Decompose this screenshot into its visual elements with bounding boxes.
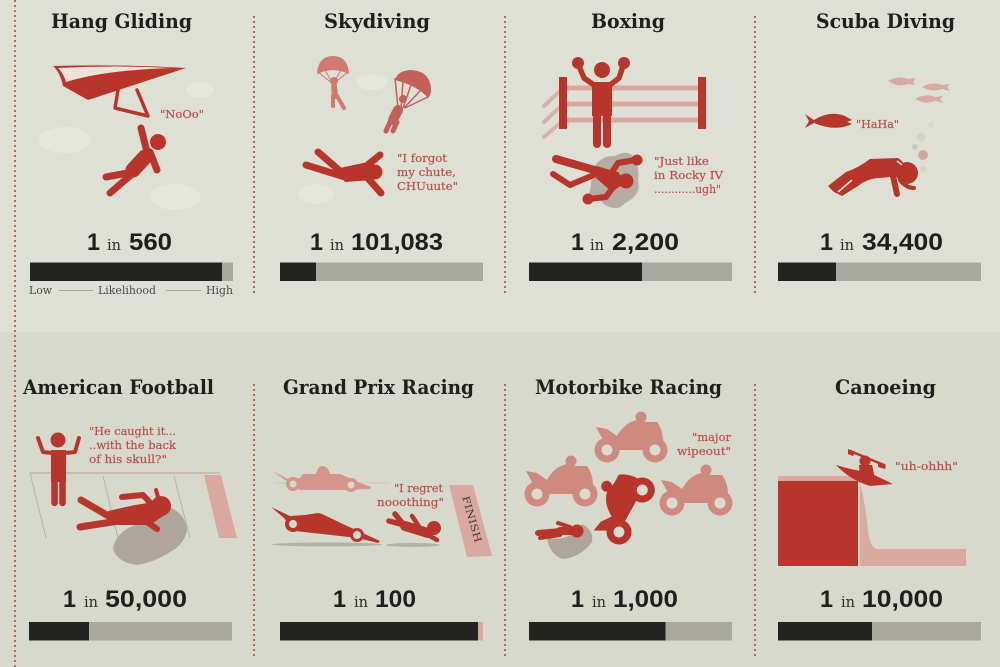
stat: hang gliding 1 in 560: in <box>107 236 121 254</box>
stat: boxing: 2,200 <box>612 229 679 256</box>
quote: "HaHa" <box>856 118 899 131</box>
quote: "NoOo" <box>160 108 204 121</box>
stat: hang gliding 1 in 560: 560 <box>129 229 172 256</box>
panel: american football <box>22 375 237 565</box>
heading: american football: American Football <box>22 375 214 399</box>
icon: bubbles <box>912 122 934 172</box>
stat: skydiving: 101,083 <box>351 229 443 256</box>
panel: grand prix racing <box>271 375 492 557</box>
icon: large parachutist <box>386 70 431 131</box>
icon: fallen boxer <box>553 153 642 208</box>
heading: grand prix racing: Grand Prix Racing <box>283 375 474 399</box>
panel: motorbike racing <box>524 375 732 559</box>
stat: football: 50,000 <box>105 586 187 613</box>
quote: "I forgot <box>397 152 448 165</box>
icon: finish sign: FINISH <box>459 495 483 544</box>
stat: grand prix: 1 <box>333 586 346 613</box>
stat: grand prix <box>333 586 416 613</box>
icon: hang glider <box>53 65 186 116</box>
panel: hang gliding <box>39 9 214 210</box>
stat: grand prix: in <box>354 593 368 611</box>
quote: nooothing" <box>377 496 444 509</box>
quote: CHUuute" <box>397 180 458 193</box>
stat: skydiving: in <box>330 236 344 254</box>
quote <box>654 155 724 196</box>
heading: motorbike racing: Motorbike Racing <box>535 375 722 399</box>
stat: scuba: 1 <box>820 229 833 256</box>
heading: boxing: Boxing <box>591 9 665 33</box>
stat: motorbike: in <box>592 593 606 611</box>
quote: "uh-ohhh" <box>895 460 958 473</box>
heading: scuba diving: Scuba Diving <box>816 9 955 33</box>
stat: football: 1 <box>63 586 76 613</box>
icon: end zone field <box>30 473 237 538</box>
stat: canoeing: 10,000 <box>862 586 943 613</box>
stat: boxing <box>571 229 679 256</box>
icon: winning boxer <box>572 57 630 144</box>
quote: ............ugh" <box>654 183 721 196</box>
icon: small parachutist <box>317 56 349 108</box>
icon: boxing ring <box>544 77 706 137</box>
quote: of his skull?" <box>89 453 167 466</box>
statistics row 1 <box>87 229 943 256</box>
clouds <box>298 74 388 204</box>
stat: grand prix: 100 <box>375 586 416 613</box>
stat: scuba: in <box>840 236 854 254</box>
icon: finish sign <box>449 485 492 557</box>
clouds <box>39 82 214 210</box>
heading: hang gliding: Hang Gliding <box>51 9 192 33</box>
icon: blood pool <box>547 524 592 559</box>
stat: canoeing <box>820 586 943 613</box>
stat: football <box>63 586 187 613</box>
icon: diver <box>828 158 918 196</box>
icon: wheelie motorbike <box>579 460 659 549</box>
stat: scuba <box>820 229 943 256</box>
quote <box>89 425 176 466</box>
icon: distant fish <box>888 77 950 103</box>
icon: left motorbike <box>524 456 598 506</box>
panel: skydiving <box>298 9 458 204</box>
icon: kayaker <box>836 449 893 486</box>
icon: fallen rider <box>538 523 584 538</box>
icon: thrown driver <box>389 514 441 540</box>
stat: boxing: in <box>590 236 604 254</box>
stat: skydiving <box>310 229 443 256</box>
heading: skydiving: Skydiving <box>324 9 430 33</box>
icon: waterfall <box>778 476 966 566</box>
icon: distant racing car <box>272 466 390 492</box>
icon: fallen player <box>80 490 171 529</box>
stat: hang gliding 1 in 560: 1 <box>87 229 100 256</box>
quote: in Rocky IV <box>654 169 724 182</box>
heading: canoeing: Canoeing <box>835 375 936 399</box>
stat: scuba: 34,400 <box>862 229 943 256</box>
panel: canoeing <box>778 375 966 566</box>
quote: my chute, <box>397 166 456 179</box>
likelihood bars row 1 <box>30 262 981 281</box>
likelihood bars row 2 <box>29 622 981 640</box>
quote: "major <box>692 431 732 444</box>
likelihood legend: Likelihood <box>98 284 156 297</box>
quote <box>377 482 444 509</box>
quote: "I regret <box>394 482 444 495</box>
icon: top motorbike <box>594 412 668 462</box>
quote: ..with the back <box>89 439 176 452</box>
likelihood legend <box>29 284 233 297</box>
icon: falling man <box>106 128 166 193</box>
icon: blood pool <box>113 507 187 565</box>
stat: canoeing: in <box>841 593 855 611</box>
quote <box>677 431 732 458</box>
panel: scuba diving <box>805 9 955 196</box>
icon: red fish <box>805 114 852 128</box>
quote: wipeout" <box>677 445 731 458</box>
stat: football: in <box>84 593 98 611</box>
stat: motorbike: 1,000 <box>613 586 678 613</box>
icon: standing referee <box>38 432 79 503</box>
quote <box>397 152 458 193</box>
stat: canoeing: 1 <box>820 586 833 613</box>
statistics row 2 <box>63 586 943 613</box>
icon: crashed car <box>271 507 380 543</box>
quote: "He caught it... <box>89 425 176 438</box>
stat: skydiving: 1 <box>310 229 323 256</box>
likelihood legend: Low <box>29 284 53 297</box>
stat: boxing: 1 <box>571 229 584 256</box>
shadows <box>272 542 440 547</box>
stat: hang gliding 1 in 560 <box>87 229 172 256</box>
quote: "Just like <box>654 155 709 168</box>
dotted column dividers <box>15 0 755 667</box>
likelihood legend: High <box>206 284 233 297</box>
panel: boxing <box>544 9 724 208</box>
stat: motorbike <box>571 586 678 613</box>
stat: motorbike: 1 <box>571 586 584 613</box>
icon: right motorbike <box>660 464 732 516</box>
icon: falling skydiver <box>306 152 382 193</box>
